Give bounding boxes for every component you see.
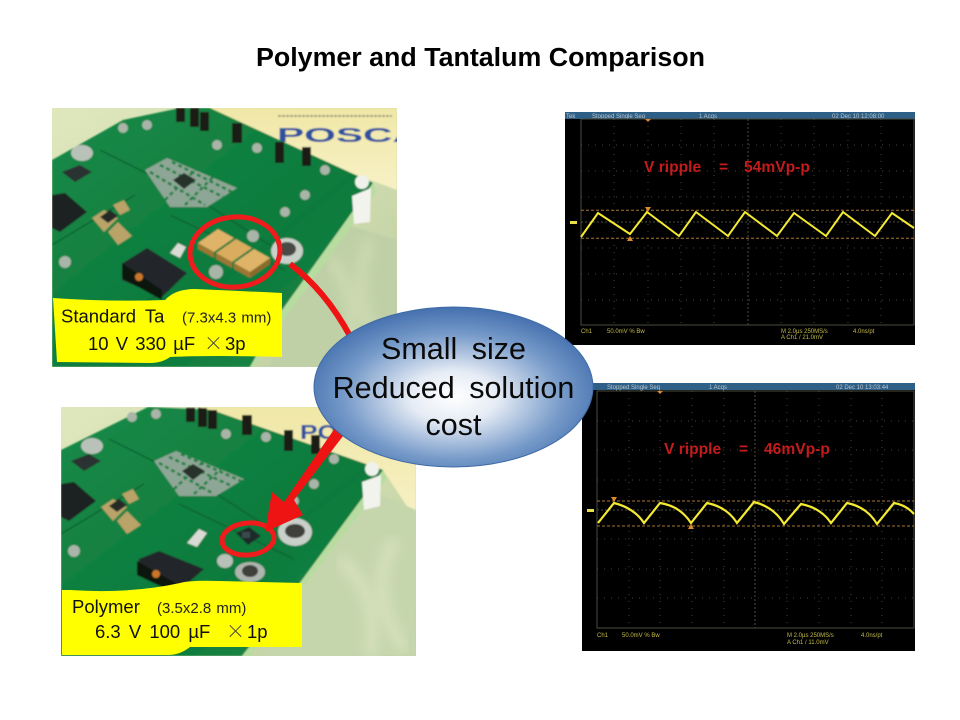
main inductor: [122, 248, 187, 297]
highlight ring: tantalum capacitors: [187, 213, 283, 291]
scope status bar text: Tek: [566, 114, 576, 120]
small parts: [71, 454, 101, 471]
label: polymer specification: 6.3 V 100 µF: [95, 621, 210, 642]
connector: from oval to tantalum ring: [290, 264, 350, 336]
scope status bar text: 02 Dec 10 12:08:00: [832, 114, 885, 120]
scope readouts: A Ch1 / 21.0mV: [781, 335, 823, 341]
POSCAP logo on card: PO: [300, 422, 338, 444]
scope readouts: M 2.0µs 250MS/s: [781, 329, 828, 335]
oscilloscope: polymer ripple: [582, 383, 915, 651]
arrow: from oval to polymer ring: [265, 428, 343, 532]
scope readouts: M 2.0µs 250MS/s: [787, 633, 834, 639]
scope readouts: A Ch1 / 11.0mV: [787, 640, 829, 646]
callout text: cost: [426, 408, 482, 442]
title: Polymer and Tantalum Comparison: [256, 44, 705, 72]
ground nut: [278, 518, 312, 546]
label: polymer specification: [62, 581, 302, 655]
tantalum capacitors: [198, 229, 270, 278]
scope status bar text: 1 Acqs: [699, 114, 717, 120]
ripple reading: 54mVp-p: [744, 159, 810, 176]
scope readouts: 4.0ns/pt: [853, 329, 875, 335]
silk pads and pins: [68, 409, 339, 557]
label: polymer specification: Polymer: [72, 596, 140, 617]
scope readouts: [597, 633, 883, 646]
controller IC: [182, 464, 205, 480]
panel: polymer board photo: [61, 407, 416, 656]
ripple reading: V ripple: [644, 159, 702, 176]
scope status bar text: Stopped Single Seq: [592, 114, 645, 120]
label: polymer specification: ×: [226, 617, 245, 644]
ground nut: [271, 238, 303, 264]
callout text: Reduced solution: [333, 371, 574, 405]
scope readouts: 50.0mV % Bw: [607, 329, 645, 335]
panel: standard tantalum board photo: [52, 108, 397, 367]
oscilloscope: standard Ta ripple: [565, 112, 915, 345]
scope readouts: [581, 329, 875, 341]
scope status bar text: 1 Acqs: [709, 385, 727, 391]
main inductor: [138, 550, 204, 584]
scope readouts: Ch1: [581, 329, 593, 335]
label: polymer specification: 1p: [247, 621, 268, 642]
scope status bar text: 02 Dec 10 13:03:44: [836, 385, 889, 391]
jumpers: [176, 108, 311, 166]
label: polymer specification: (3.5x2.8 mm): [157, 600, 246, 617]
label: standard Ta specification: (7.3x4.3 mm): [182, 310, 271, 326]
callout text: Small size: [381, 332, 526, 366]
ripple reading: =: [739, 441, 748, 458]
highlight ring: polymer capacitor: [221, 521, 275, 557]
scope readouts: 50.0mV % Bw: [622, 633, 660, 639]
label: standard Ta specification: Standard Ta: [61, 306, 165, 326]
polymer capacitor: [236, 527, 261, 545]
silk pads and pins: [59, 120, 330, 279]
label: standard Ta specification: 10 V 330 µF: [88, 333, 195, 354]
callout oval: [314, 307, 593, 467]
ripple reading: 46mVp-p: [764, 441, 830, 458]
label: standard Ta specification: [53, 289, 282, 363]
jumpers: [186, 408, 320, 454]
scope status bar text: Stopped Single Seq: [607, 385, 660, 391]
POSCAP logo on card: POSCAP: [277, 125, 449, 147]
scope readouts: 4.0ns/pt: [861, 633, 883, 639]
ripple waveform: [598, 502, 914, 524]
ripple waveform: [581, 212, 914, 237]
controller IC: [173, 173, 196, 189]
ripple reading: V ripple: [664, 441, 722, 458]
ripple reading: =: [719, 159, 728, 176]
label: standard Ta specification: 3p: [225, 333, 246, 354]
label: standard Ta specification: ×: [204, 329, 223, 356]
scope readouts: Ch1: [597, 633, 609, 639]
small parts: [62, 165, 92, 182]
